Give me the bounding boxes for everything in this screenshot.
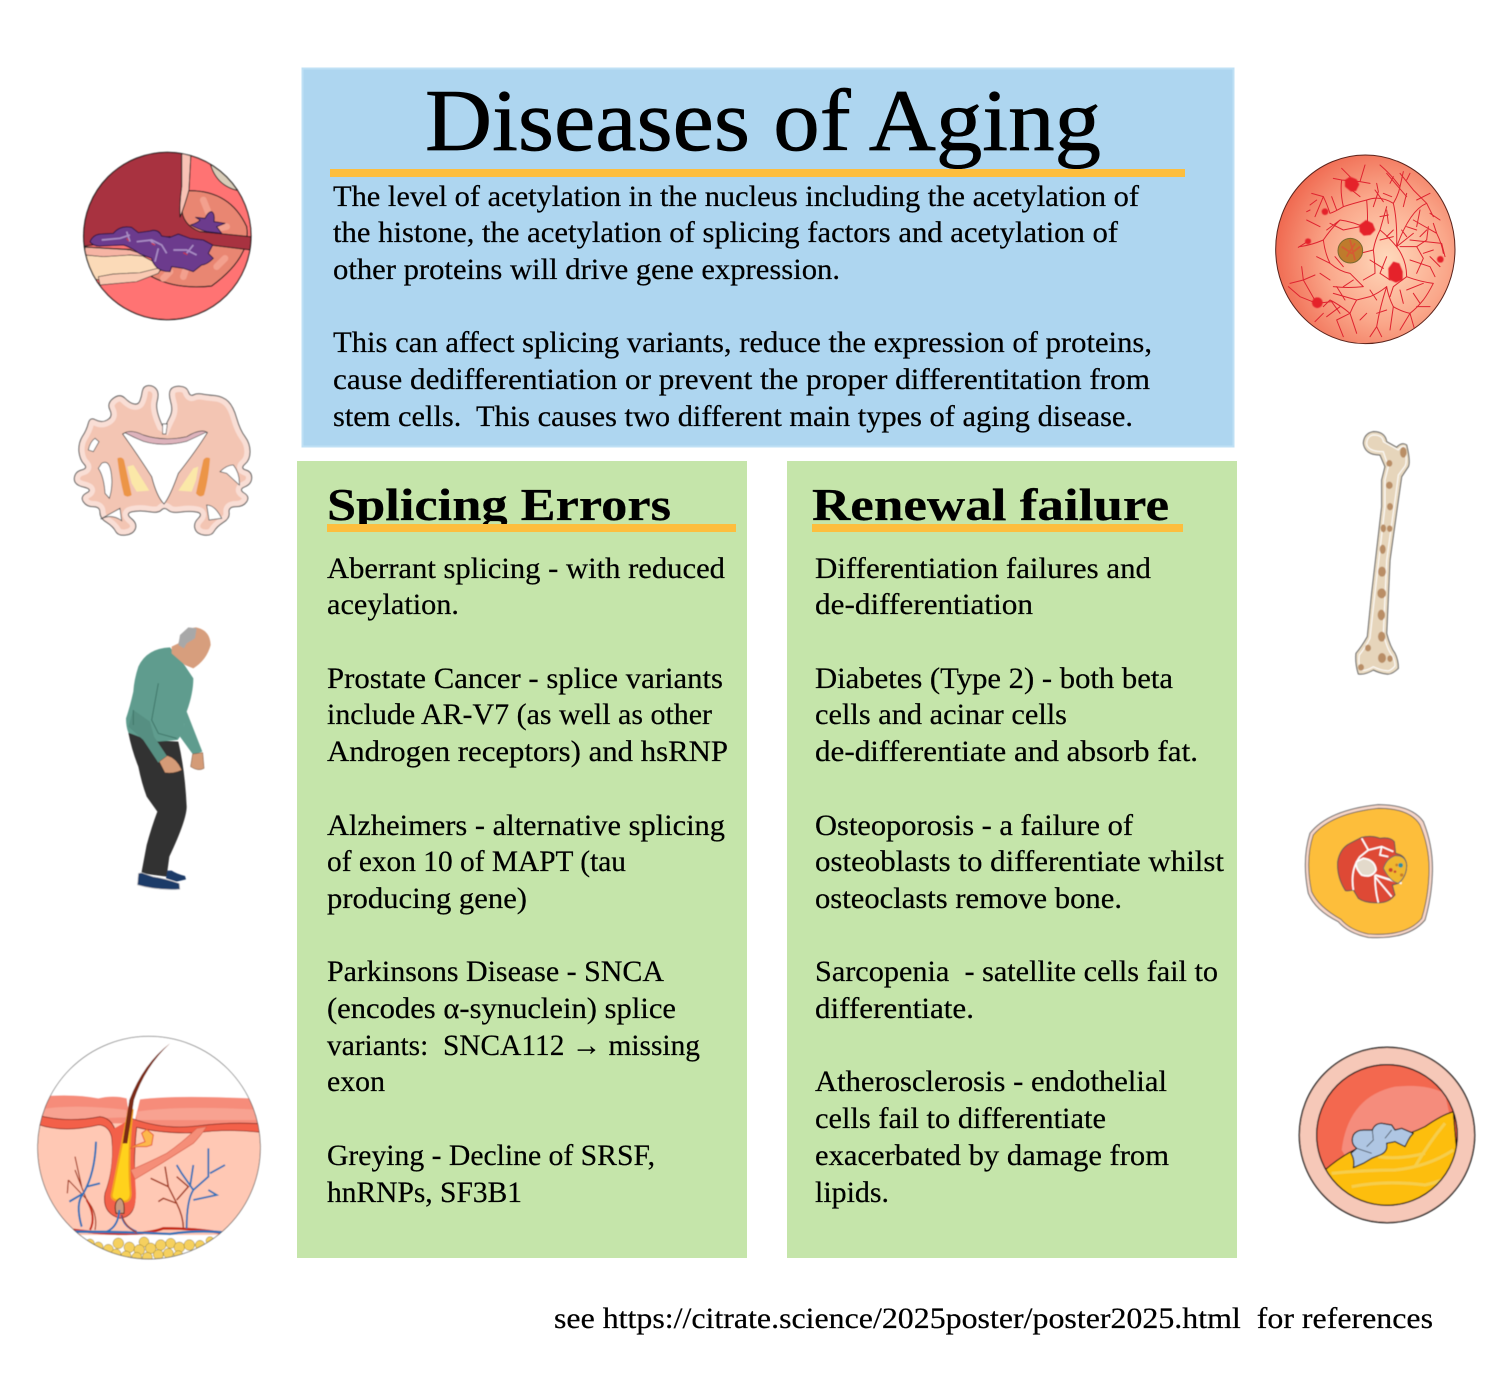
text block: renewal failure list: cells and acinar cells xyxy=(815,699,1067,731)
text block: acetylation intro xyxy=(333,181,1152,433)
text block: splicing error list: Greying - Decline of SRSF, xyxy=(327,1140,655,1172)
icon: prostate tumour xyxy=(80,150,257,323)
panel: splicing errors xyxy=(297,461,747,1258)
title underline xyxy=(330,169,1185,177)
icon: artery with plaque xyxy=(1299,1047,1475,1223)
text block: splicing error list: variants: SNCA112 → missing xyxy=(327,1030,700,1062)
text block: acetylation intro: cause dedifferentiation or prevent the proper differentitation from xyxy=(333,364,1150,396)
text block: splicing error list: aceylation. xyxy=(327,589,459,621)
icon: thigh muscle cross-section xyxy=(1305,805,1432,938)
text block: splicing error list: Prostate Cancer - splice variants xyxy=(327,663,723,695)
heading: splicing errors: Splicing Errors xyxy=(327,479,671,530)
text block: renewal failure list: Osteoporosis - a failure of xyxy=(815,810,1133,842)
heading underline xyxy=(327,524,736,532)
text block: renewal failure list: cells fail to differentiate xyxy=(815,1103,1106,1135)
icon: hair follicle skin section xyxy=(37,1036,263,1262)
text block: acetylation intro: stem cells. This causes two different main types of aging disease. xyxy=(333,401,1133,433)
icon: femur bone xyxy=(1356,432,1409,674)
text block: splicing error list: producing gene) xyxy=(327,883,527,915)
text block: splicing error list: of exon 10 of MAPT (tau xyxy=(327,846,626,878)
text block: renewal failure list: exacerbated by damage from xyxy=(815,1140,1169,1172)
icon: stooped elderly man xyxy=(126,627,211,890)
text block: renewal failure list: Differentiation failures and xyxy=(815,553,1151,585)
text block: acetylation intro: the histone, the acetylation of splicing factors and acetylation of xyxy=(333,217,1118,249)
title: Diseases of Aging xyxy=(425,73,1101,170)
text block: renewal failure list xyxy=(815,553,1225,1209)
heading: renewal failure: Renewal failure xyxy=(812,479,1169,530)
heading underline xyxy=(812,524,1183,532)
text block: renewal failure list: Atherosclerosis - endothelial xyxy=(815,1066,1167,1098)
text block: renewal failure list: osteoblasts to differentiate whilst xyxy=(815,846,1225,878)
text block: acetylation intro: This can affect splicing variants, reduce the expression of proteins, xyxy=(333,327,1152,359)
text block: splicing error list: include AR-V7 (as well as other xyxy=(327,699,712,731)
text block: splicing error list: hnRNPs, SF3B1 xyxy=(327,1177,522,1209)
icon: brain section xyxy=(74,386,252,535)
text block: renewal failure list: de-differentiation xyxy=(815,589,1033,621)
text block: renewal failure list: differentiate. xyxy=(815,993,974,1025)
panel: renewal failure xyxy=(787,461,1237,1258)
panel: introduction xyxy=(302,68,1234,446)
text block: splicing error list: Alzheimers - alternative splicing xyxy=(327,810,725,842)
text block: splicing error list xyxy=(327,553,728,1209)
text block: splicing error list: Androgen receptors) and hsRNP xyxy=(327,736,728,768)
text block: renewal failure list: Diabetes (Type 2) - both beta xyxy=(815,663,1173,695)
text block: renewal failure list: osteoclasts remove bone. xyxy=(815,883,1122,915)
text block: splicing error list: Parkinsons Disease - SNCA xyxy=(327,956,665,988)
text block: acetylation intro: other proteins will drive gene expression. xyxy=(333,254,840,286)
text block: splicing error list: Aberrant splicing - with reduced xyxy=(327,553,725,585)
text block: splicing error list: (encodes α-synuclein) splice xyxy=(327,993,676,1025)
text block: renewal failure list: lipids. xyxy=(815,1177,889,1209)
text block: renewal failure list: Sarcopenia - satellite cells fail to xyxy=(815,956,1218,988)
text block: splicing error list: exon xyxy=(327,1066,385,1098)
text block: renewal failure list: de-differentiate and absorb fat. xyxy=(815,736,1198,768)
icon: retina with haemorrhages xyxy=(1276,155,1455,344)
text block: acetylation intro: The level of acetylation in the nucleus including the acetylation of xyxy=(333,181,1139,213)
footer: references note: see https://citrate.science/2025poster/poster2025.html for references xyxy=(554,1303,1433,1335)
